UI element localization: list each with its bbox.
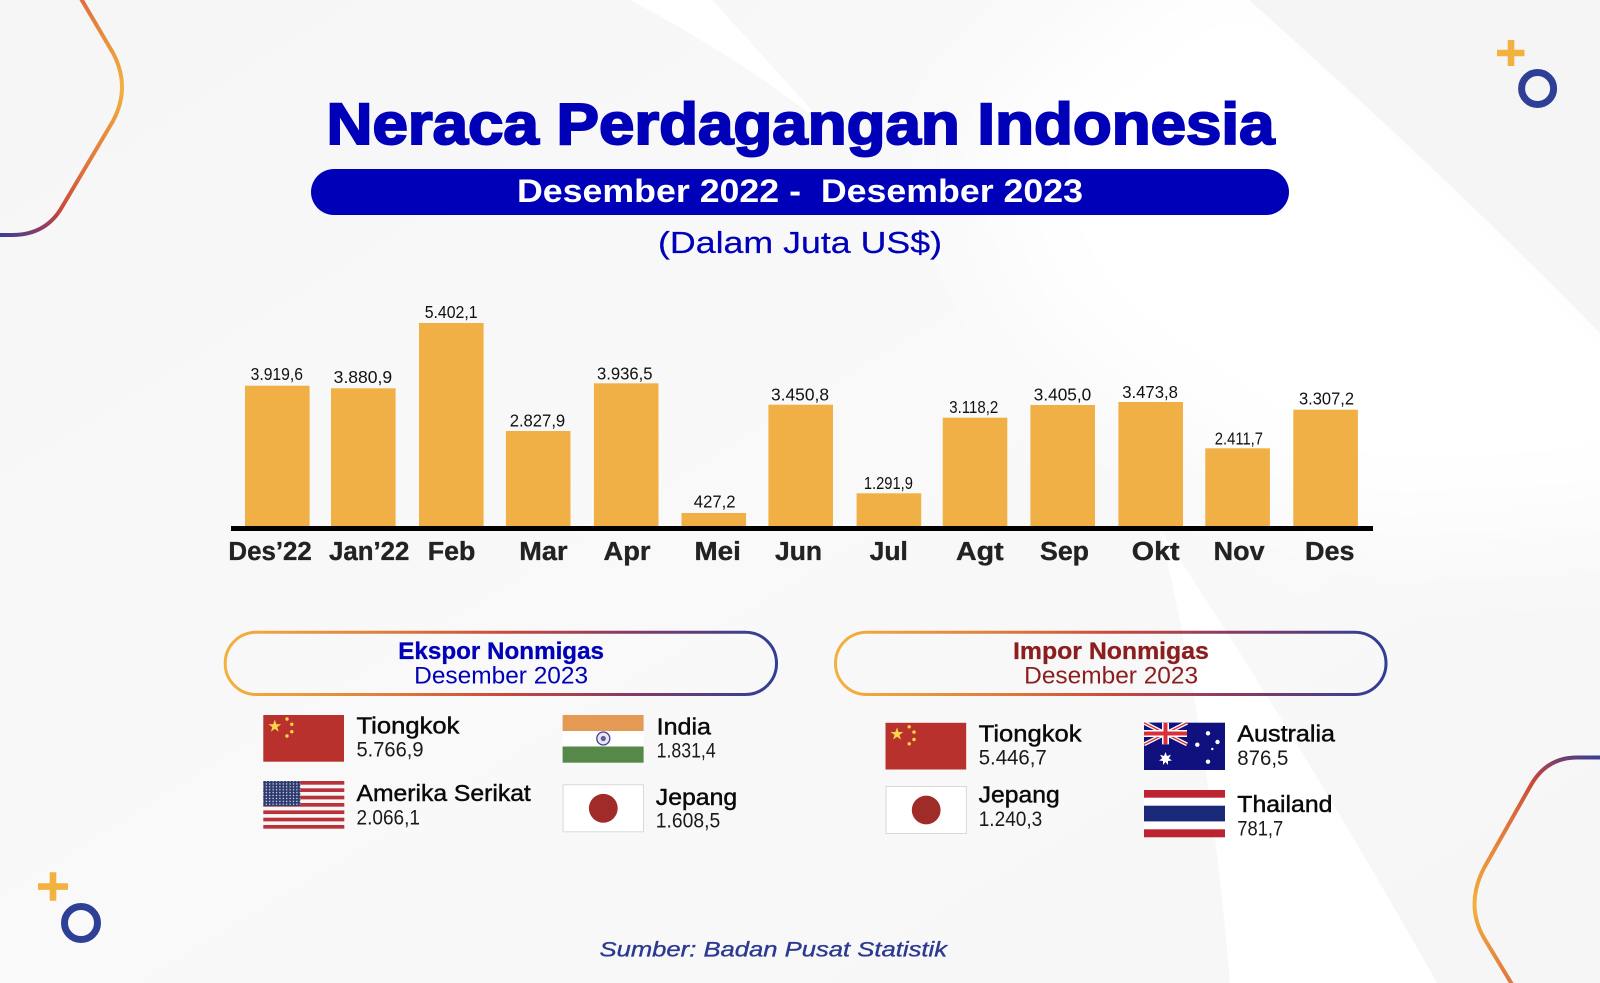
impor Thailand — [1237, 791, 1332, 840]
ekspor Amerika Serikat: Amerika Serikat — [356, 780, 531, 806]
impor Jepang — [979, 782, 1060, 831]
decorative curve: top left — [0, 0, 122, 235]
month labels: Feb — [428, 538, 475, 566]
value labels — [251, 302, 1354, 512]
ekspor Jepang — [656, 784, 737, 833]
impor Tiongkok: 5.446,7 — [979, 746, 1047, 770]
bar chart — [228, 302, 1373, 566]
ekspor India: India — [657, 713, 711, 739]
ekspor Jepang: Jepang — [656, 784, 737, 810]
impor heading pill — [836, 632, 1386, 694]
subtitle pill — [311, 169, 1289, 215]
value labels: 3.880,9 — [334, 367, 392, 387]
value labels: 3.473,8 — [1122, 382, 1178, 402]
month labels: Des — [1305, 538, 1354, 566]
flag: Amerika Serikat — [263, 781, 344, 829]
value labels: 427,2 — [694, 492, 736, 512]
value labels: 2.411,7 — [1215, 428, 1263, 448]
flag: Jepang — [563, 785, 644, 832]
ekspor Tiongkok: 5.766,9 — [356, 738, 424, 762]
month labels: Apr — [604, 538, 651, 566]
ekspor Jepang: 1.608,5 — [656, 809, 720, 833]
value labels: 5.402,1 — [425, 302, 478, 322]
value labels: 3.450,8 — [771, 384, 829, 404]
value labels: 3.919,6 — [251, 364, 303, 384]
value labels: 2.827,9 — [510, 411, 565, 431]
ekspor Tiongkok: Tiongkok — [356, 712, 460, 738]
month labels: Sep — [1040, 538, 1089, 566]
month labels: Agt — [956, 538, 1004, 566]
month labels: Jun — [775, 538, 822, 566]
ekspor India — [657, 713, 716, 763]
ekspor heading pill: Desember 2023 — [414, 662, 588, 689]
value labels: 3.307,2 — [1299, 389, 1354, 409]
impor Jepang: Jepang — [979, 782, 1060, 808]
value labels: 3.405,0 — [1034, 384, 1091, 404]
ekspor heading pill: Ekspor Nonmigas — [398, 638, 604, 665]
flag: Jepang — [886, 786, 966, 834]
subtitle pill: Desember 2022 - Desember 2023 — [517, 173, 1083, 209]
month labels: Nov — [1214, 538, 1265, 566]
impor Thailand: Thailand — [1237, 791, 1332, 817]
impor Australia: Australia — [1237, 721, 1335, 747]
impor Australia — [1237, 721, 1335, 770]
impor Jepang: 1.240,3 — [979, 807, 1042, 831]
month labels: Jul — [870, 538, 908, 566]
month labels: Mar — [519, 538, 568, 566]
flag: India — [563, 715, 644, 763]
impor heading pill: Impor Nonmigas — [1013, 638, 1209, 665]
impor Tiongkok — [979, 720, 1082, 770]
ekspor Amerika Serikat: 2.066,1 — [356, 805, 420, 829]
icon: plus and ring bottom left — [38, 872, 98, 940]
impor Australia: 876,5 — [1237, 746, 1288, 770]
panel: impor nonmigas — [836, 632, 1386, 840]
impor heading pill: Desember 2023 — [1024, 662, 1198, 689]
flag: Tiongkok — [263, 715, 344, 762]
ekspor Amerika Serikat — [356, 780, 531, 829]
source note: Sumber: Badan Pusat Statistik — [600, 939, 949, 962]
value labels: 3.118,2 — [949, 397, 998, 417]
impor Tiongkok: Tiongkok — [979, 720, 1082, 746]
bars — [245, 323, 1358, 527]
axis line — [231, 526, 1373, 531]
value labels: 1.291,9 — [864, 473, 913, 493]
unit note: (Dalam Juta US$) — [658, 225, 942, 260]
ekspor heading pill — [225, 632, 776, 694]
value labels: 3.936,5 — [597, 363, 652, 383]
flag: Tiongkok — [886, 723, 966, 770]
icon: plus and ring top right — [1497, 40, 1554, 104]
title: Neraca Perdagangan Indonesia — [326, 92, 1275, 157]
month labels — [228, 538, 1354, 566]
decorative curve: bottom right — [1474, 757, 1600, 983]
month labels: Okt — [1132, 538, 1180, 566]
flag: Thailand — [1144, 790, 1225, 837]
impor Thailand: 781,7 — [1237, 816, 1283, 840]
flag: Australia — [1144, 723, 1225, 770]
ekspor Tiongkok — [356, 712, 460, 762]
month labels: Mei — [694, 538, 741, 566]
ekspor India: 1.831,4 — [657, 739, 716, 763]
panel: ekspor nonmigas — [225, 632, 776, 833]
month labels: Jan’22 — [329, 538, 409, 566]
month labels: Des’22 — [228, 538, 312, 566]
